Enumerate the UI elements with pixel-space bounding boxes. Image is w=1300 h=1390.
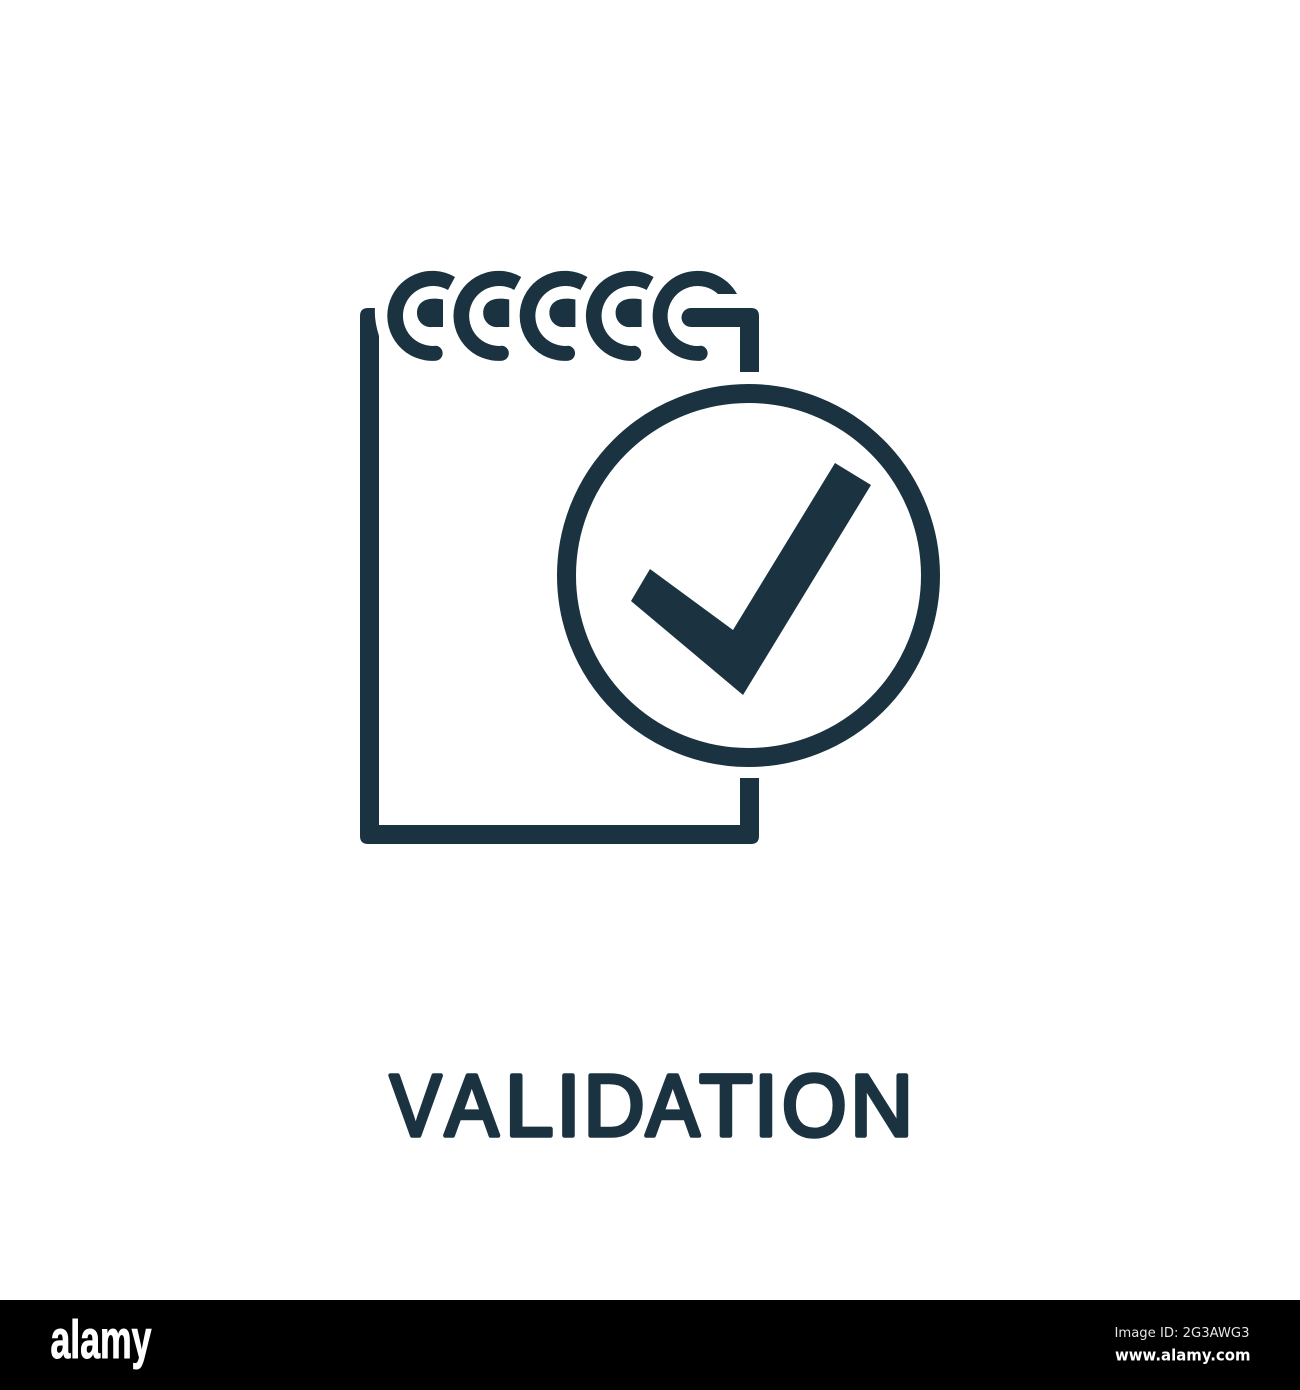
title: D [584,1058,645,1155]
title: N [850,1058,913,1155]
image id: Image ID: 2G3AWG3 [1114,1325,1250,1341]
title [390,1057,913,1155]
title: A [646,1057,700,1154]
title: O [782,1058,847,1155]
title: T [699,1058,753,1155]
title: I [754,1058,778,1155]
title: L [505,1058,553,1155]
check circle [566,394,930,758]
notepad page outline [360,308,759,844]
alamy logo: alamy [50,1310,152,1370]
notepad top right corner [682,308,759,372]
icon: spiral notepad with check mark [360,271,930,844]
footer bar [0,1300,1300,1390]
spiral binding coils [387,271,737,361]
website: www.alamy.com [1115,1346,1250,1364]
title: I [556,1058,581,1155]
title: V [390,1058,442,1155]
check mark [631,463,871,695]
title: A [445,1057,499,1154]
